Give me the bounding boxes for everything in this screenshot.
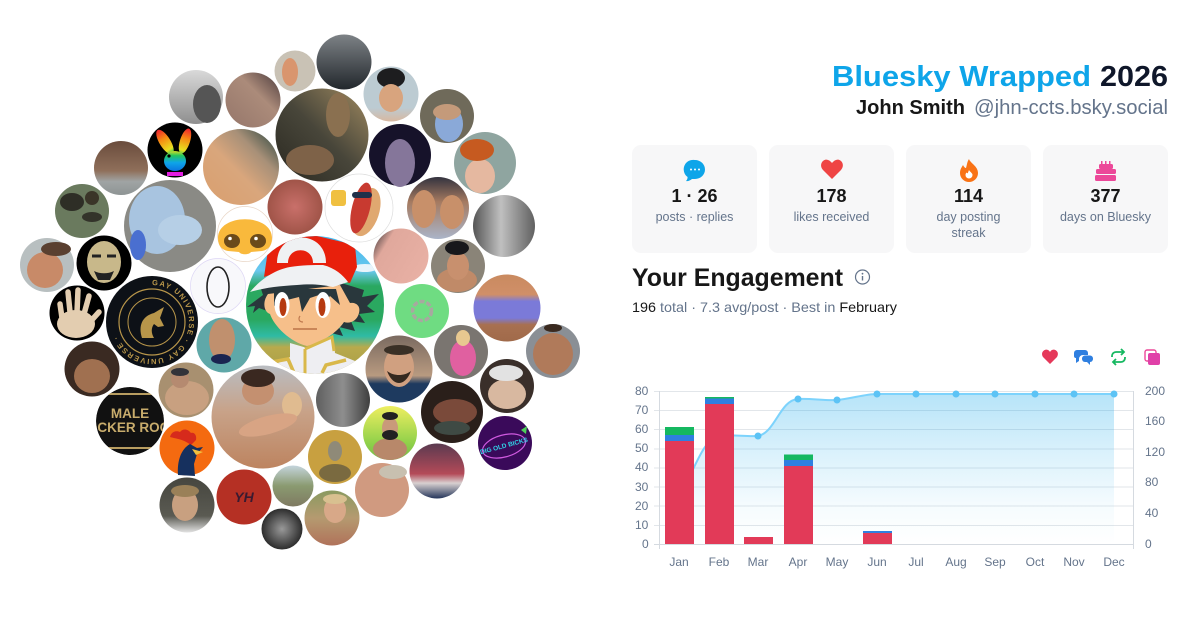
avatar: male locker room logo: MALE bbox=[111, 406, 149, 421]
display name: John Smith bbox=[856, 97, 965, 119]
hair spikes bbox=[247, 282, 379, 336]
icon: heart bbox=[821, 160, 843, 179]
icon: speech bubble bbox=[684, 160, 705, 181]
avatar: denim bbox=[124, 180, 216, 272]
eyes bbox=[274, 292, 290, 318]
avatar: dark brown tones bbox=[421, 381, 483, 443]
icon: reposts legend bbox=[1112, 349, 1125, 365]
avatar: warm close-up bbox=[203, 129, 279, 205]
avatar: dim bedroom bbox=[276, 88, 368, 182]
icon: info bbox=[856, 270, 870, 284]
avatar: red hair bbox=[454, 132, 516, 194]
right axis labels: 0 bbox=[1145, 537, 1152, 551]
month labels: Jul bbox=[908, 555, 924, 569]
title: Bluesky Wrapped bbox=[832, 61, 1091, 93]
avatar: hot dog mascot bbox=[325, 174, 393, 242]
avatar: two friends bbox=[407, 177, 469, 239]
cumulative area bbox=[679, 394, 1114, 544]
avatar: mirror selfie bbox=[64, 342, 120, 396]
avatar: golden statue bbox=[308, 430, 362, 484]
stat card: posting streak bbox=[906, 145, 1031, 253]
avatar: young man in car bbox=[160, 478, 214, 532]
avatar: large portrait bbox=[212, 366, 314, 468]
left axis labels: 40 bbox=[635, 460, 649, 474]
face bbox=[264, 285, 359, 346]
stat card: days on bluesky: 377 bbox=[1090, 186, 1121, 206]
icon: birthday cake bbox=[1095, 161, 1116, 181]
month labels: Feb bbox=[709, 555, 730, 569]
avatar cluster bbox=[20, 34, 580, 550]
month labels: Jan bbox=[669, 555, 689, 569]
right axis labels bbox=[1145, 384, 1165, 551]
right axis labels: 40 bbox=[1145, 506, 1159, 520]
month labels bbox=[669, 555, 1125, 569]
stat card: likes received: 178 bbox=[816, 186, 847, 206]
cap bbox=[264, 236, 357, 283]
cap brim bbox=[250, 265, 348, 292]
avatar: green default bbox=[395, 284, 449, 338]
right axis labels: 80 bbox=[1145, 475, 1159, 489]
avatar: boy in cap bbox=[364, 66, 418, 122]
stat card: posts and replies: posts · replies bbox=[656, 210, 733, 224]
avatar: pleading emoji bbox=[218, 206, 272, 262]
stat card: posts and replies bbox=[632, 145, 757, 253]
avatar: rainbow bunny bbox=[148, 122, 202, 178]
stat card: posting streak: day posting bbox=[937, 210, 1001, 224]
avatar: guy fawkes mask bbox=[76, 236, 132, 290]
icon: flame bbox=[960, 159, 978, 182]
avatar: face on pillow bbox=[20, 238, 74, 292]
left axis labels: 30 bbox=[635, 480, 649, 494]
avatar: swimwear bbox=[196, 318, 252, 372]
jacket bbox=[278, 339, 355, 374]
stat card: posting streak: streak bbox=[951, 226, 986, 240]
stat card: likes received: likes received bbox=[794, 210, 869, 224]
avatar: monochrome torso bbox=[316, 373, 370, 427]
avatar: warm tones bbox=[226, 72, 280, 128]
avatar: grey texture bbox=[473, 195, 535, 257]
icon: likes legend bbox=[1042, 350, 1058, 364]
engagement chart bbox=[635, 384, 1165, 569]
bar: march bbox=[744, 537, 773, 544]
right axis labels: 160 bbox=[1145, 414, 1165, 428]
left axis labels: 80 bbox=[635, 384, 649, 398]
avatar: rooster bbox=[160, 420, 214, 476]
avatar: dark creature bbox=[316, 34, 372, 90]
month labels: Aug bbox=[945, 555, 967, 569]
avatar: male locker room logo bbox=[96, 387, 164, 455]
avatar: neon eggplant: DIG OLD BICKS bbox=[479, 437, 529, 456]
right axis labels: 200 bbox=[1145, 384, 1165, 398]
right axis labels: 120 bbox=[1145, 445, 1165, 459]
chart legend bbox=[1042, 349, 1160, 365]
month labels: Oct bbox=[1026, 555, 1045, 569]
left axis labels: 60 bbox=[635, 422, 649, 436]
avatar: neon eggplant bbox=[478, 416, 532, 470]
avatar: backwards cap bbox=[431, 239, 485, 293]
avatar: bearded man bbox=[366, 336, 432, 402]
avatar: ash ketchum cartoon bbox=[246, 236, 385, 375]
avatar: grey stone bbox=[262, 508, 302, 550]
avatar: pale fabric bbox=[480, 359, 534, 413]
engagement summary: 196 total · 7.3 avg/post · Best in February bbox=[632, 299, 897, 315]
month labels: Mar bbox=[748, 555, 768, 569]
stat card: days on bluesky bbox=[1043, 145, 1168, 253]
avatar: stone landscape bbox=[272, 466, 314, 506]
month labels: Dec bbox=[1103, 555, 1125, 569]
left axis labels: 20 bbox=[635, 499, 649, 513]
fringe bbox=[274, 289, 340, 312]
avatar: doodle on white bbox=[190, 258, 246, 314]
icon: quotes legend bbox=[1145, 350, 1160, 365]
avatar: cartoon bearded man bbox=[363, 406, 417, 460]
icon: replies legend bbox=[1074, 350, 1093, 365]
avatar: lilac tones bbox=[474, 274, 540, 342]
month labels: Jun bbox=[867, 555, 887, 569]
stat card: posts and replies: 1 · 26 bbox=[671, 186, 718, 206]
avatar: camouflage bbox=[55, 184, 109, 238]
left axis labels: 0 bbox=[642, 537, 649, 551]
cap logo bbox=[277, 238, 326, 263]
bar: june bbox=[863, 531, 892, 544]
bar: april bbox=[784, 454, 813, 544]
avatar: purple figure bbox=[369, 124, 431, 187]
bar: january bbox=[665, 427, 694, 544]
left axis labels: 50 bbox=[635, 441, 649, 455]
avatar: small mirror bbox=[274, 50, 316, 92]
handle: @jhn-ccts.bsky.social bbox=[974, 97, 1168, 119]
avatar: gay universe badge: GAY UNIVERSE · GAY UNIVERSE · bbox=[115, 280, 194, 364]
bar: february bbox=[705, 397, 734, 544]
month labels: Apr bbox=[789, 555, 807, 569]
avatar: moustache bbox=[158, 362, 214, 418]
month labels: May bbox=[826, 555, 848, 569]
avatar: blue towel bbox=[420, 89, 474, 143]
avatar: blond boy bbox=[304, 490, 360, 546]
avatar: athletic torso bbox=[526, 324, 580, 378]
heading: your engagement: Your Engagement bbox=[632, 264, 844, 292]
avatar: grey seaside bbox=[169, 70, 223, 124]
avatar: open hand bbox=[50, 286, 104, 340]
left axis labels: 70 bbox=[635, 403, 649, 417]
avatar: pink close-up bbox=[374, 228, 428, 284]
left axis labels: 10 bbox=[635, 518, 649, 532]
left axis labels bbox=[635, 384, 649, 551]
stat card: likes received bbox=[769, 145, 894, 253]
cumulative line bbox=[679, 390, 1118, 497]
avatar: male locker room logo: LOCKER ROOM bbox=[79, 420, 181, 435]
avatar: rose tones bbox=[268, 180, 322, 234]
avatar: yh logo: YH bbox=[234, 489, 255, 505]
title: 2026 bbox=[1100, 61, 1168, 93]
stat card: days on bluesky: days on Bluesky bbox=[1060, 210, 1152, 224]
avatar: yh logo bbox=[216, 470, 272, 524]
stat card: posting streak: 114 bbox=[954, 186, 983, 206]
month labels: Sep bbox=[984, 555, 1006, 569]
avatar: pink sweater bbox=[434, 325, 488, 379]
avatar: soft skin tones bbox=[355, 463, 409, 517]
avatar: plaid shirt bbox=[410, 444, 464, 498]
grid lines bbox=[654, 392, 1133, 526]
avatar: dark hair, grey cloth bbox=[94, 141, 148, 195]
month labels: Nov bbox=[1063, 555, 1085, 569]
